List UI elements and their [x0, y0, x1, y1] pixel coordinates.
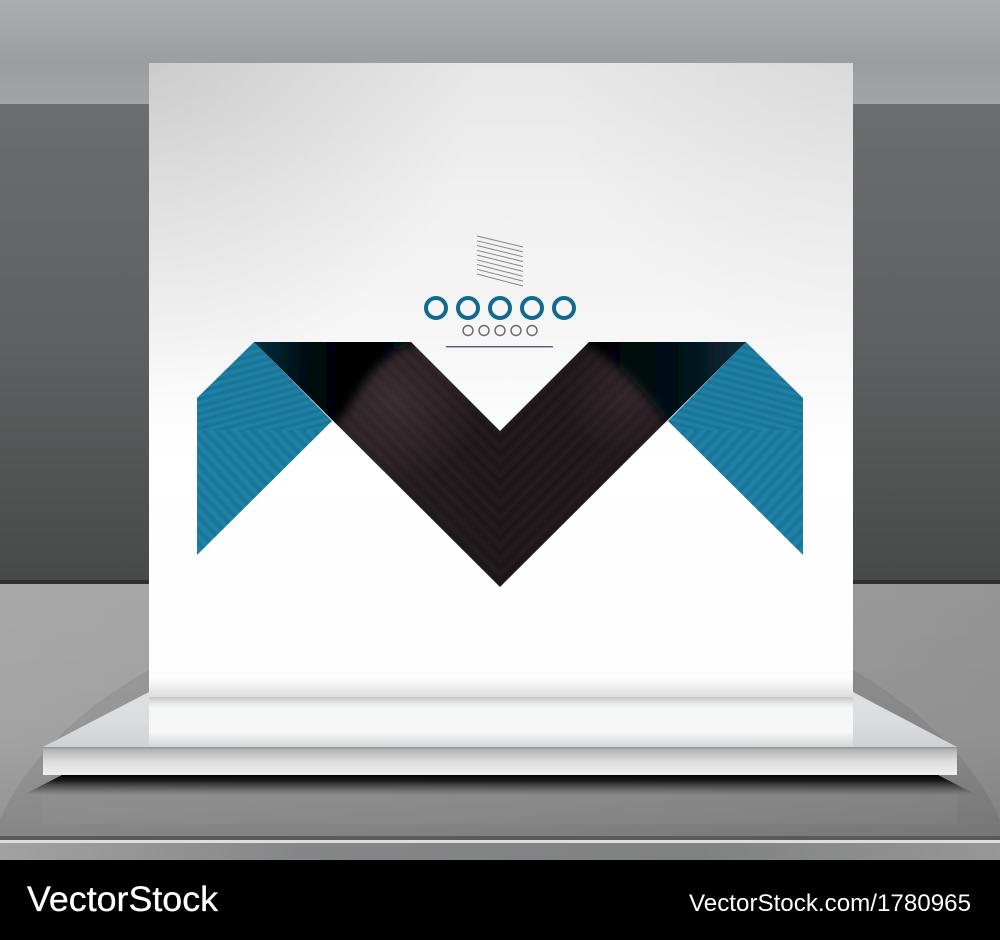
icon: hatch lines	[477, 236, 523, 286]
background: upper wall band	[0, 0, 1000, 104]
chevron top-left dark fold	[254, 342, 416, 427]
footer brand name: VectorStock	[27, 880, 219, 919]
chevron top-right dark fold	[583, 342, 746, 426]
icon row: small grey rings	[463, 326, 537, 336]
footer bar	[0, 860, 1000, 940]
platform	[43, 692, 957, 775]
platform top surface	[43, 692, 957, 747]
background: floor	[0, 580, 1000, 860]
divider line under rings	[446, 346, 553, 347]
footer image id: VectorStock.com/1780965	[689, 890, 971, 917]
icon row: large blue rings	[426, 298, 574, 318]
chevron faint stripes	[250, 340, 750, 590]
panel: white display board	[149, 63, 853, 697]
shape: central dark chevron	[254, 342, 746, 587]
platform reflection of board	[149, 697, 853, 747]
background: dark wall	[0, 104, 1000, 580]
shape: right blue wing	[668, 342, 803, 555]
platform floor reflection	[43, 795, 957, 824]
platform front edge	[43, 747, 957, 775]
shape: left blue wing	[197, 342, 332, 555]
floor shadow arc	[0, 670, 1000, 836]
platform shadow	[23, 775, 977, 795]
